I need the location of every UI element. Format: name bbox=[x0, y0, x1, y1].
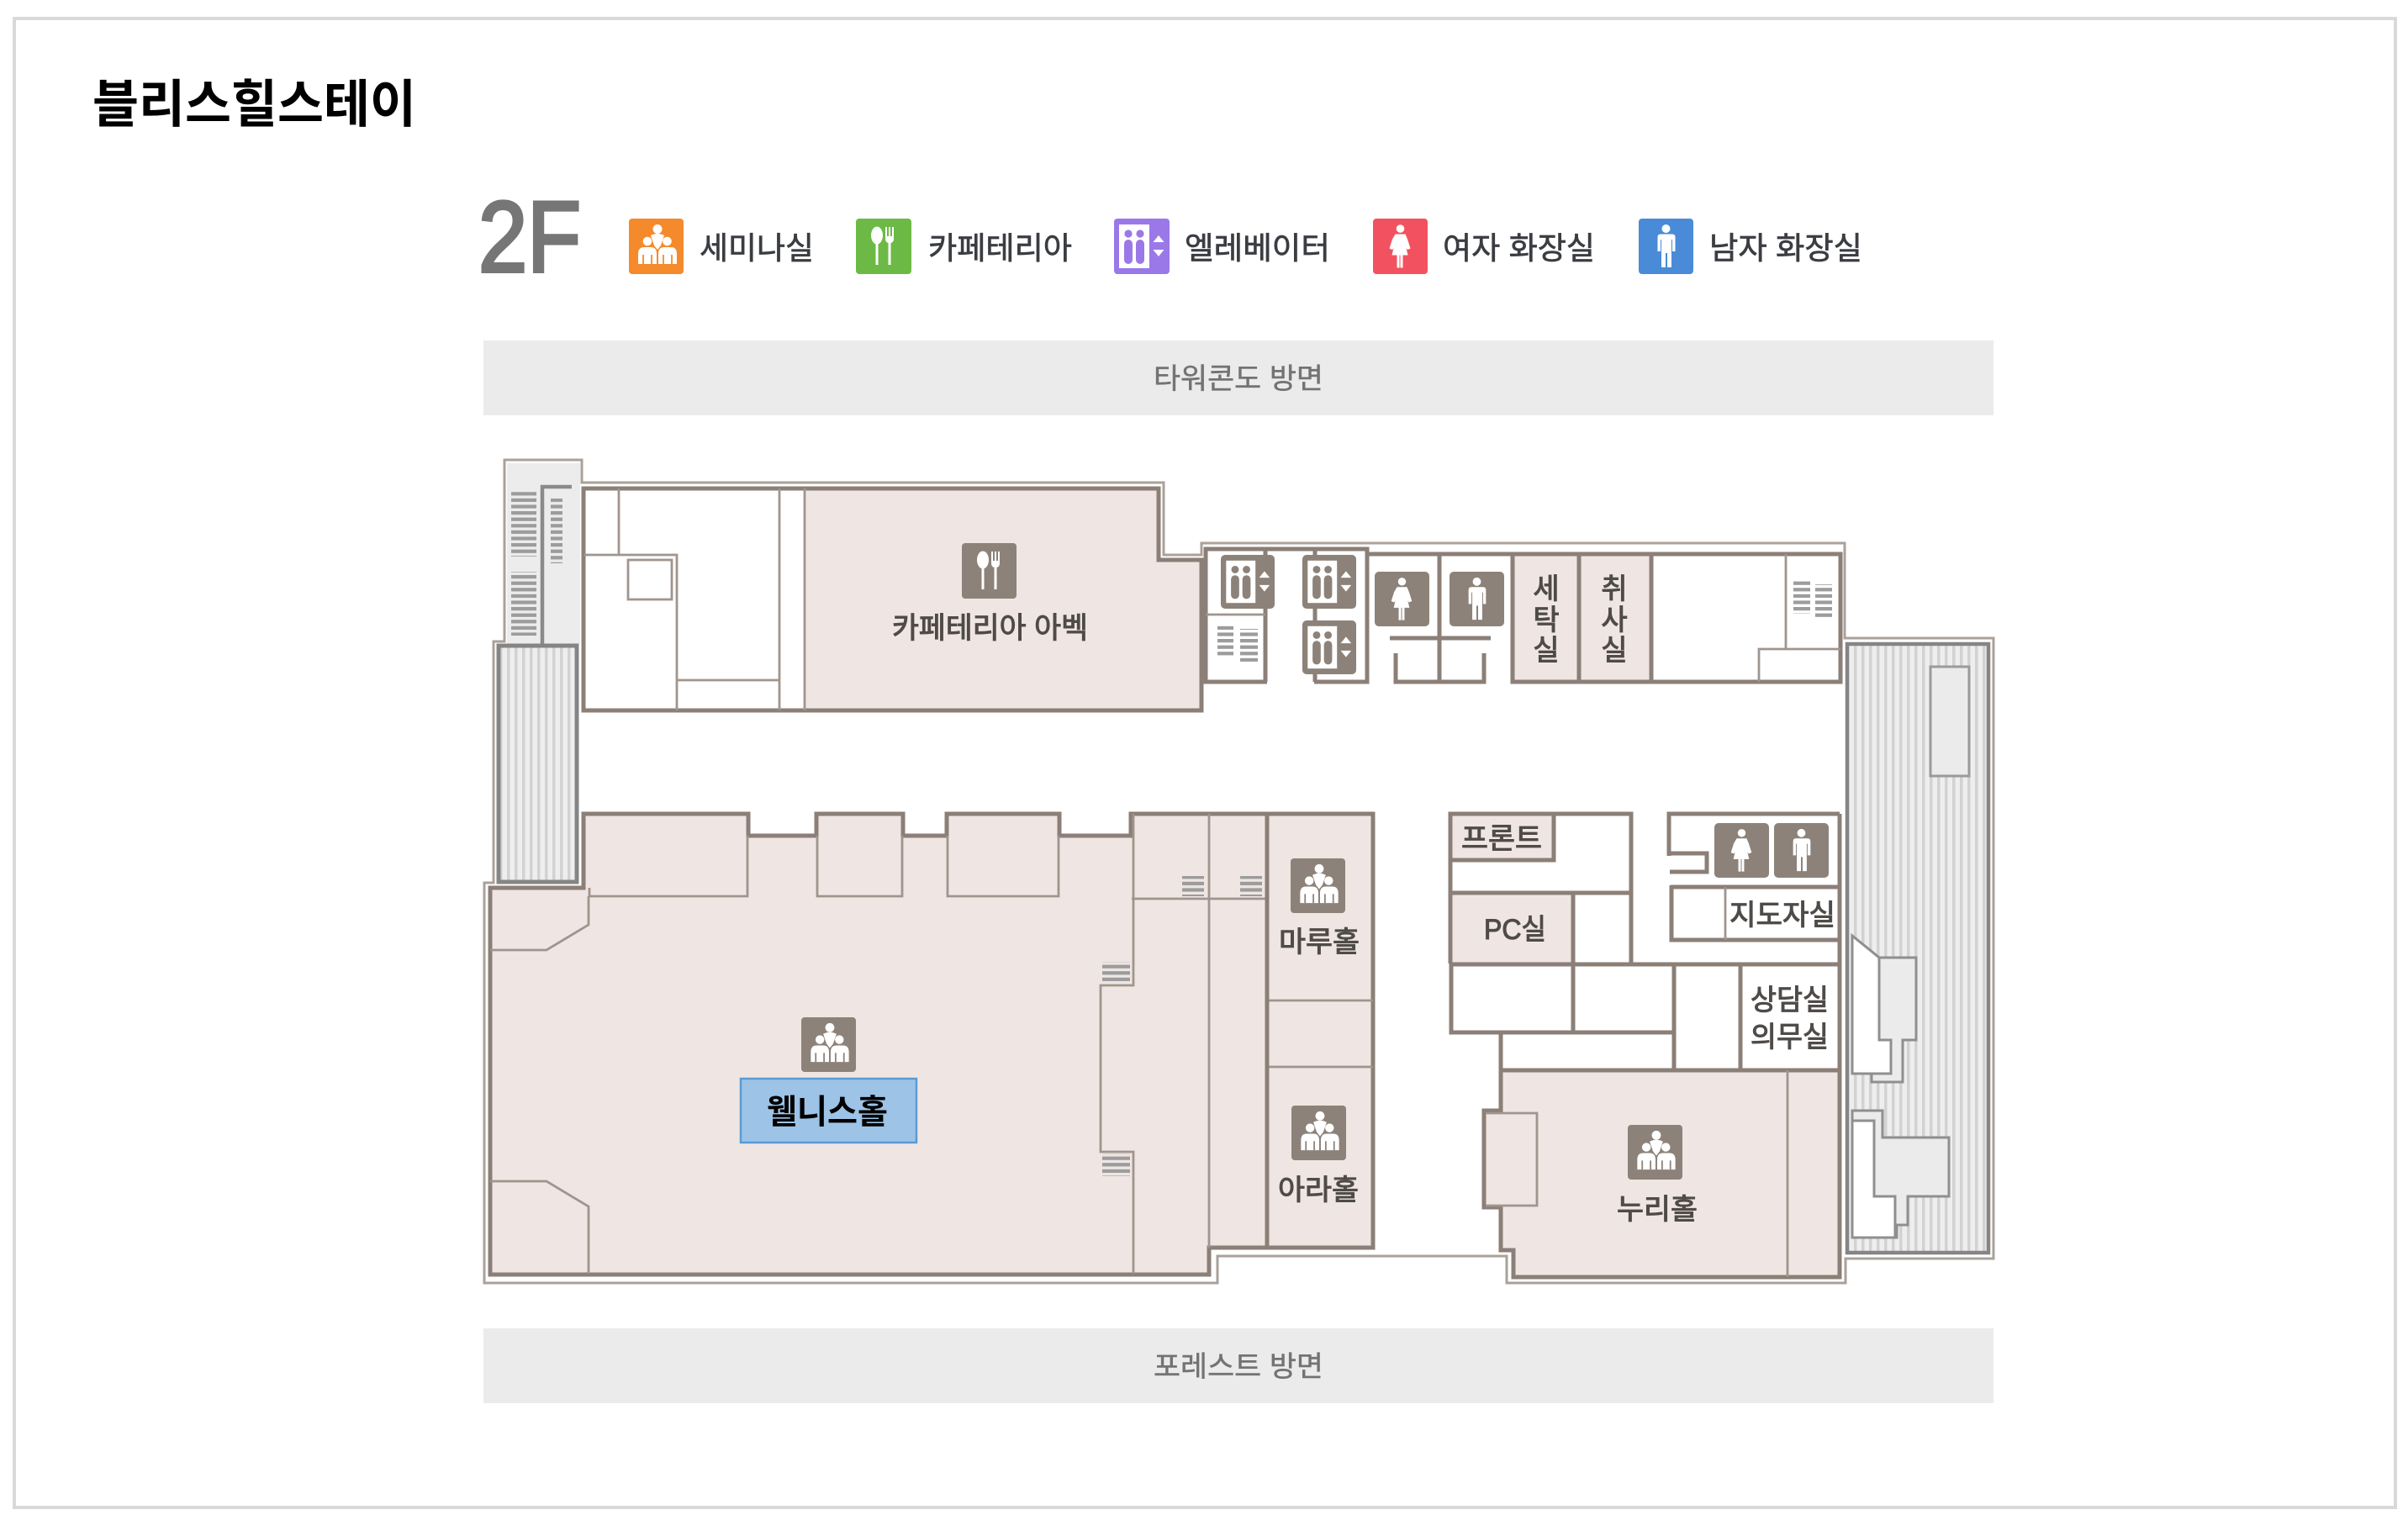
office walls bbox=[1450, 814, 1840, 1277]
elevator lobby walls bbox=[1206, 549, 1367, 682]
floor plan bbox=[484, 460, 1993, 1283]
floor label 2F: 2F bbox=[478, 181, 581, 293]
service corridor walls bbox=[1367, 554, 1840, 682]
legend item: elevator bbox=[1114, 219, 1330, 274]
icon: cafeteria bbox=[962, 543, 1017, 599]
legend item: cafeteria: 카페테리아 bbox=[928, 231, 1072, 266]
label: cafeteria abec: 카페테리아 아벡 bbox=[892, 612, 1088, 645]
label: kitchen bbox=[1601, 573, 1628, 667]
nuri hall fill bbox=[1484, 1070, 1840, 1277]
laundry and kitchen room fills bbox=[1514, 556, 1650, 680]
label: laundry room: 실 bbox=[1533, 635, 1560, 667]
cafeteria partitions bbox=[584, 488, 805, 710]
cafeteria block bbox=[584, 488, 1201, 710]
legend item: seminar room bbox=[629, 219, 814, 274]
walls bbox=[1669, 814, 1840, 964]
main hall block bbox=[490, 814, 1373, 1275]
nuri hall partitions bbox=[1486, 1070, 1788, 1277]
direction bar: forest: 포레스트 방면 bbox=[1154, 1351, 1323, 1383]
icon: seminar, ara hall bbox=[1291, 1106, 1346, 1160]
icon: seminar, wellness hall bbox=[801, 1017, 856, 1072]
icon: elevator 3 bbox=[1302, 620, 1356, 674]
room divider bbox=[1265, 814, 1270, 1248]
label: medical room: 의무실 bbox=[1751, 1021, 1829, 1053]
label: instructor room: 지도자실 bbox=[1729, 900, 1835, 932]
label: laundry room: 탁 bbox=[1533, 604, 1560, 636]
legend item: men's restroom bbox=[1639, 219, 1862, 274]
legend item: women's restroom bbox=[1373, 219, 1595, 274]
legend item: women's restroom: 여자 화장실 bbox=[1443, 231, 1595, 266]
hall stairs bbox=[1102, 876, 1262, 1176]
legend item: elevator: 엘레베이터 bbox=[1185, 231, 1330, 266]
icon: elevator 1 bbox=[1221, 555, 1275, 609]
label: laundry room bbox=[1533, 573, 1560, 667]
label: kitchen: 실 bbox=[1601, 635, 1628, 667]
title: 블리스힐스테이 bbox=[92, 76, 416, 133]
label: kitchen: 취 bbox=[1601, 573, 1628, 605]
right terrace (hatched) bbox=[1847, 644, 1988, 1253]
hall inner lines bbox=[490, 814, 1373, 1274]
highlight label: wellness hall: 웰니스홀 bbox=[767, 1094, 888, 1131]
lower structure bbox=[1852, 1111, 1949, 1238]
icon: seminar, nuri hall bbox=[1628, 1125, 1682, 1180]
direction bar: tower condo: 타워콘도 방면 bbox=[1154, 363, 1323, 395]
instructor room partition bbox=[1724, 887, 1726, 940]
legend item: men's restroom: 남자 화장실 bbox=[1709, 231, 1862, 266]
hall fill and walls bbox=[490, 814, 1373, 1275]
icon: seminar, maru hall bbox=[1291, 858, 1345, 913]
cafeteria room fill bbox=[805, 488, 1201, 710]
terrace rectangle bbox=[1930, 667, 1969, 776]
small room bbox=[628, 560, 672, 599]
legend bbox=[629, 219, 1862, 274]
cafeteria block walls bbox=[584, 488, 1201, 710]
terrace area bbox=[1847, 644, 1988, 1253]
label: maru hall: 마루홀 bbox=[1279, 926, 1360, 958]
legend item: seminar room: 세미나실 bbox=[700, 231, 814, 266]
icon: men's restroom bbox=[1774, 823, 1829, 878]
restroom entrance walls bbox=[1390, 638, 1491, 682]
service block (elevators, restrooms) bbox=[1206, 549, 1840, 682]
upper structure bbox=[1852, 936, 1916, 1082]
stairs bbox=[1217, 580, 1832, 662]
PC room bbox=[1452, 893, 1573, 963]
direction bar: tower condo bbox=[483, 340, 1993, 415]
icon: women's restroom bbox=[1714, 823, 1769, 878]
restroom and instructor block bbox=[1669, 814, 1840, 964]
icon: elevator 2 bbox=[1302, 555, 1356, 609]
label: ara hall: 아라홀 bbox=[1278, 1175, 1359, 1206]
label: kitchen: 사 bbox=[1601, 604, 1628, 636]
label: nuri hall: 누리홀 bbox=[1617, 1194, 1698, 1226]
legend item: cafeteria bbox=[856, 219, 1072, 274]
thin partitions bbox=[1206, 554, 1840, 682]
front and offices block bbox=[1450, 814, 1840, 1277]
building outer outline bbox=[484, 460, 1993, 1283]
label: PC room: PC실 bbox=[1484, 914, 1546, 946]
direction bar: forest bbox=[483, 1328, 1993, 1403]
icon: men's restroom bbox=[1450, 572, 1504, 626]
label: laundry room: 세 bbox=[1533, 573, 1560, 605]
left stair tower bbox=[507, 463, 580, 644]
icon: women's restroom bbox=[1375, 572, 1429, 626]
highlight label: wellness hall bbox=[741, 1079, 916, 1143]
label: counseling room: 상담실 bbox=[1751, 984, 1829, 1016]
front desk room bbox=[1452, 815, 1554, 860]
left terrace (hatched) bbox=[499, 646, 577, 882]
label: front: 프론트 bbox=[1461, 823, 1542, 855]
